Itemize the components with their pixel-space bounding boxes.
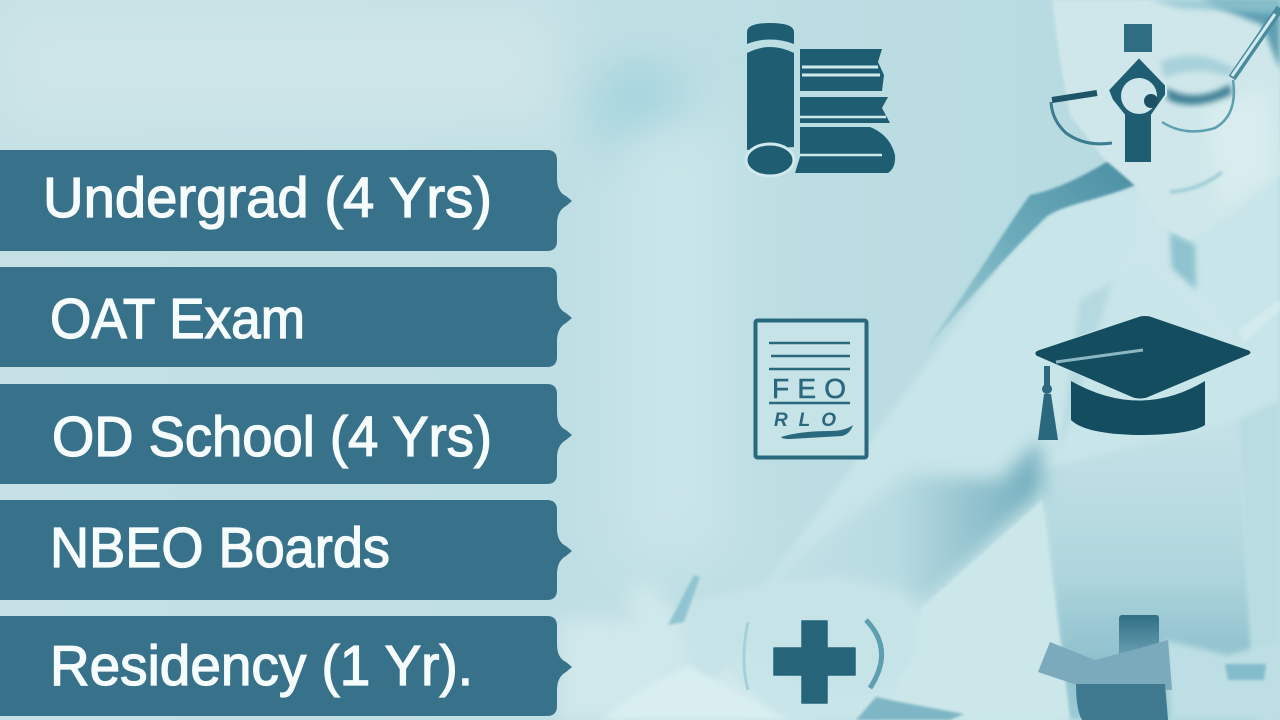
banner: OAT Exam xyxy=(0,267,572,367)
coat xyxy=(700,150,1280,720)
icon: faded equipment xyxy=(1038,615,1172,720)
banner: Residency (1 Yr).: Residency (1 Yr). xyxy=(50,634,473,698)
paper xyxy=(600,665,790,720)
banner: OD School (4 Yrs) xyxy=(0,384,572,484)
arm and hand xyxy=(650,578,918,700)
background photo: optometrist figure xyxy=(600,0,1280,720)
hair strand xyxy=(925,160,1135,350)
icon: ophthalmoscope xyxy=(1108,24,1166,163)
mouth xyxy=(1170,172,1222,192)
banner: OAT Exam: OAT Exam xyxy=(50,287,305,351)
icon: eye chart xyxy=(756,320,866,458)
collar xyxy=(1112,185,1238,345)
banner: OD School (4 Yrs): OD School (4 Yrs) xyxy=(52,405,492,469)
face xyxy=(1052,0,1280,240)
banner: Undergrad (4 Yrs): Undergrad (4 Yrs) xyxy=(43,166,492,230)
desk paper light wedge xyxy=(882,500,1070,720)
banner: NBEO Boards: NBEO Boards xyxy=(50,516,390,580)
icon: books xyxy=(746,23,895,176)
icon: eye chart: FEO xyxy=(772,373,846,404)
banner: Residency (1 Yr). xyxy=(0,616,572,716)
banner: Undergrad (4 Yrs) xyxy=(0,150,572,251)
icon: graduation cap xyxy=(1035,316,1251,440)
icon: medical cross xyxy=(744,620,882,703)
eyebrow / eye shadow xyxy=(1160,55,1240,78)
banner: NBEO Boards xyxy=(0,500,572,600)
icon: eye chart: RLO xyxy=(774,410,836,431)
sleeve xyxy=(760,440,1042,607)
pen xyxy=(668,575,700,625)
glasses xyxy=(1052,93,1097,100)
